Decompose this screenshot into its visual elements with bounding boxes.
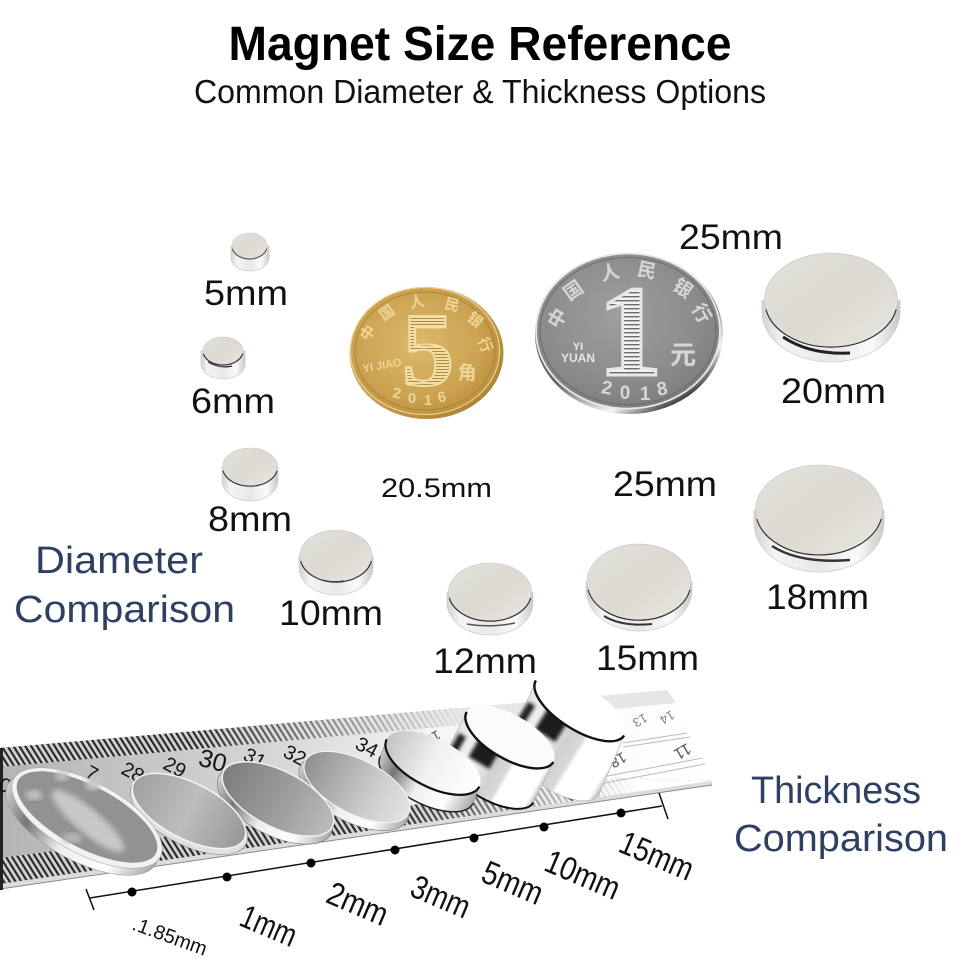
coin: 5 jiao: 银 (463, 308, 487, 332)
thickness magnet 3mm (287, 737, 421, 846)
coin: 5 jiao: 行 (474, 335, 495, 356)
coin: 1 yuan: 1 (640, 384, 651, 405)
coin: 1 yuan: 1 (598, 260, 662, 404)
label 20mm: 20mm (781, 372, 886, 411)
magnet 12mm (447, 563, 533, 635)
coin: 5 jiao: 民 (442, 295, 461, 316)
ruler numbers: 14 (657, 707, 677, 728)
coin: 5 jiao (350, 287, 504, 419)
magnet 18mm (754, 465, 884, 572)
label 8mm: 8mm (208, 500, 292, 539)
coin: 5 jiao: 角 (457, 361, 477, 384)
ruler numbers: 34 (352, 733, 382, 763)
coin: 5 jiao: 0 (408, 390, 416, 407)
thickness magnet 2mm (205, 746, 345, 860)
ruler numbers (0, 707, 694, 798)
heading: thickness comparison: Thickness (751, 770, 921, 812)
magnet 8mm (222, 448, 278, 501)
coin: 1 yuan: 8 (655, 378, 669, 401)
label 5mm: 5mm (204, 274, 288, 313)
coin: 1 yuan: 中 (544, 305, 572, 332)
coin: 1 yuan: YI (573, 341, 583, 353)
coin: 1 yuan: 行 (687, 300, 715, 327)
coin: 1 yuan: 民 (635, 259, 658, 284)
label 20.5mm: 20.5mm (381, 473, 492, 503)
thickness magnet 5mm (368, 718, 492, 825)
ruler numbers: 11 (671, 739, 694, 762)
ruler numbers: 18 (606, 748, 629, 771)
ruler numbers: 31 (240, 744, 270, 774)
coin: 5 jiao: 国 (376, 302, 398, 325)
label thickness 1mm: 1mm (235, 897, 303, 954)
ruler numbers: 30 (196, 744, 230, 778)
coin: 1 yuan: 2 (600, 377, 614, 400)
heading: diameter comparison: Diameter (35, 540, 203, 582)
coin: 5 jiao: 1 (424, 392, 432, 409)
magnet 6mm (201, 337, 245, 379)
thickness magnet 1.85mm (0, 747, 177, 896)
thickness magnet 15mm (490, 662, 644, 814)
title: Magnet Size Reference (228, 18, 732, 71)
heading: diameter comparison (14, 540, 235, 631)
label 18mm: 18mm (766, 578, 869, 617)
label thickness 5mm: 5mm (477, 853, 549, 912)
coin: 5 jiao: 中 (357, 322, 380, 344)
coin: 1 yuan: 人 (599, 260, 622, 286)
coin: 1 yuan: 0 (620, 383, 630, 404)
coin: 5 jiao: YI JIAO (362, 357, 403, 375)
label thickness 2mm: 2mm (322, 874, 394, 933)
coin: 5 jiao: 人 (408, 293, 426, 312)
ruler (0, 690, 712, 890)
subtitle: Common Diameter & Thickness Options (194, 73, 766, 110)
label 6mm: 6mm (191, 382, 275, 421)
coin: 5 jiao: 5 (402, 291, 454, 408)
ruler numbers: 29 (160, 753, 190, 783)
label thickness 3mm: 3mm (406, 868, 476, 925)
heading: thickness comparison (734, 770, 948, 860)
heading: diameter comparison: Comparison (14, 589, 235, 631)
thickness magnet 1mm (118, 758, 260, 871)
heading: thickness comparison: Comparison (734, 818, 948, 860)
ruler numbers: 16 (422, 727, 444, 749)
dimension line (86, 793, 668, 910)
thickness magnet 10mm (433, 693, 567, 822)
ruler numbers: 28 (118, 758, 148, 788)
coin: 1 yuan (535, 254, 723, 414)
magnet 10mm (299, 530, 373, 595)
coin: 5 jiao: 2 (391, 384, 402, 403)
coin: 5 jiao: 6 (436, 388, 447, 407)
label thickness 1.85mm: .1.85mm (129, 913, 210, 960)
label thickness 15mm: 15mm (614, 823, 699, 888)
label thickness 10mm: 10mm (540, 842, 626, 907)
ruler numbers: 32 (280, 741, 310, 771)
label 25mm lower: 25mm (613, 465, 717, 504)
coin: 1 yuan: 银 (668, 274, 697, 303)
ruler numbers: 7 (81, 762, 102, 786)
coin: 1 yuan: 元 (670, 340, 696, 370)
ruler numbers: 13 (630, 710, 650, 731)
label 10mm: 10mm (279, 594, 383, 633)
magnet 15mm (586, 544, 692, 631)
coin: 1 yuan: 国 (559, 276, 588, 305)
coin: 1 yuan: YUAN (561, 351, 595, 365)
label 15mm: 15mm (596, 639, 699, 678)
magnet 20mm (762, 253, 900, 362)
label 12mm: 12mm (433, 642, 537, 681)
label 25mm upper: 25mm (679, 218, 783, 257)
magnet 5mm (231, 233, 269, 271)
